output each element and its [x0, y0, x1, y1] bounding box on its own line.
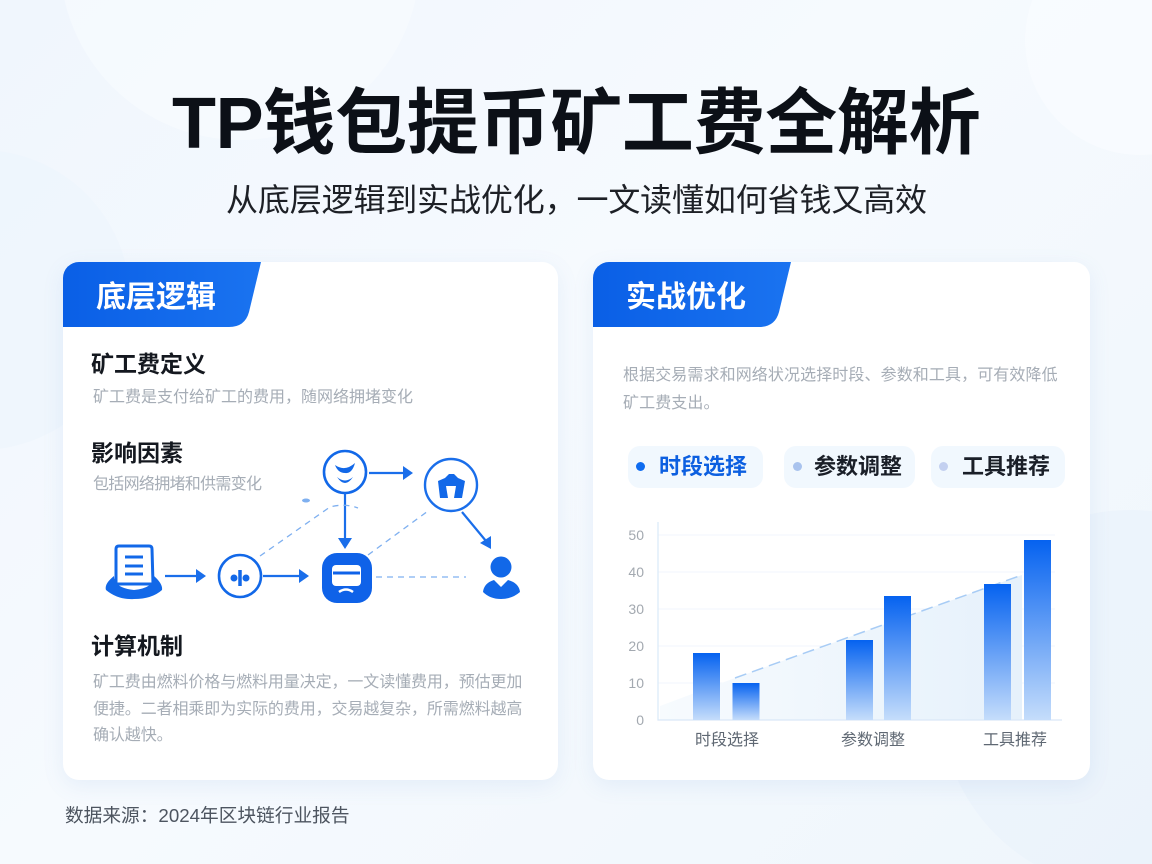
y axis labels	[628, 527, 644, 728]
panel heading tab: 实战优化: 实战优化	[626, 281, 746, 314]
y axis labels: 50	[628, 527, 644, 543]
chip: 工具推荐	[931, 446, 1065, 488]
text: calculation: 便捷。二者相乘即为实际的费用，交易越复杂，所需燃料越高	[93, 700, 522, 718]
icon: face node	[324, 451, 366, 493]
heading: 影响因素: 影响因素	[91, 440, 183, 466]
icon: hex node	[425, 459, 477, 511]
icon: document	[106, 546, 162, 599]
text: optimisation intro: 矿工费支出。	[623, 395, 720, 412]
panel heading tab: 底层逻辑	[63, 262, 261, 327]
bar chart	[628, 522, 1062, 749]
heading: 计算机制: 计算机制	[91, 633, 183, 659]
chip: 参数调整	[784, 446, 915, 488]
text: calculation	[93, 673, 522, 744]
chip: 工具推荐: 工具推荐	[962, 454, 1050, 479]
text: optimisation intro	[623, 366, 1058, 412]
x axis labels: 工具推荐	[983, 731, 1047, 749]
x axis labels: 参数调整	[841, 731, 905, 749]
panel heading tab: 实战优化	[593, 262, 791, 327]
chip: 时段选择: 时段选择	[659, 454, 747, 479]
y axis labels: 30	[628, 601, 644, 617]
icon: circle node	[219, 555, 261, 597]
panel: 底层逻辑	[63, 262, 558, 780]
text: optimisation intro: 根据交易需求和网络状况选择时段、参数和工具，可有效降低	[623, 367, 1058, 384]
y axis labels: 40	[628, 564, 644, 580]
y axis labels: 10	[628, 675, 644, 691]
panel heading tab: 底层逻辑: 底层逻辑	[96, 281, 216, 314]
bars	[693, 540, 1051, 720]
subtitle: 从底层逻辑到实战优化，一文读懂如何省钱又高效	[226, 182, 927, 218]
x axis labels	[695, 731, 1047, 749]
arrows	[165, 466, 491, 583]
flow diagram	[106, 450, 520, 603]
title: TP钱包提币矿工费全解析	[172, 84, 980, 164]
panel: 实战优化	[593, 262, 1090, 780]
icon: central node	[322, 553, 372, 603]
icon: user	[483, 556, 520, 599]
text: definition: 矿工费是支付给矿工的费用，随网络拥堵变化	[93, 389, 413, 406]
text: calculation: 矿工费由燃料价格与燃料用量决定，一文读懂费用，预估更加	[93, 674, 522, 691]
text: calculation: 确认越快。	[93, 727, 173, 744]
y axis labels: 20	[628, 638, 644, 654]
area trend	[660, 575, 1022, 720]
y axis labels: 0	[636, 712, 644, 728]
heading: 矿工费定义: 矿工费定义	[91, 351, 206, 377]
chip: 参数调整: 参数调整	[814, 454, 902, 479]
chip: 时段选择	[628, 446, 763, 488]
text: factors: 包括网络拥堵和供需变化	[93, 476, 261, 493]
footer source: 数据来源：2024年区块链行业报告	[65, 805, 350, 826]
x axis labels: 时段选择	[695, 731, 759, 749]
